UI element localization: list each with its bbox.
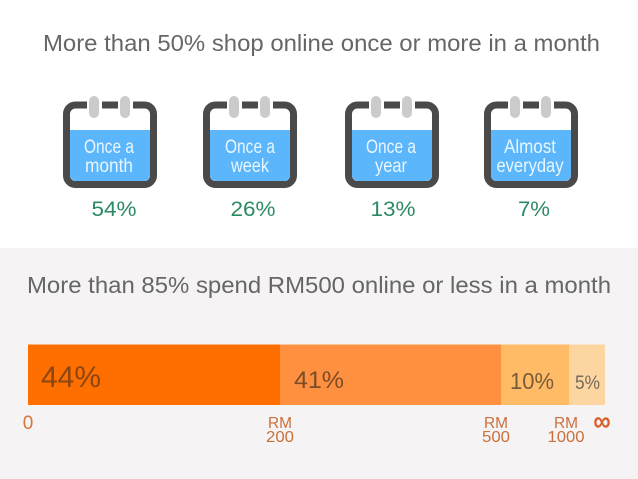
calendar icon: once a month — [66, 96, 154, 184]
value: once a week: 26% — [230, 198, 276, 221]
value: almost everyday: 7% — [518, 198, 550, 221]
calendar icon: once a year: Once a — [366, 137, 416, 158]
stacked bar chart — [28, 344, 605, 405]
calendar icon: almost everyday: Almost — [504, 137, 557, 158]
axis labels: 0 — [23, 413, 33, 434]
axis labels — [23, 406, 610, 446]
calendar icon: almost everyday — [488, 96, 574, 184]
calendar icon: once a week — [206, 96, 294, 184]
calendar icon: once a year: year — [375, 156, 408, 177]
axis labels: RM — [554, 415, 578, 432]
calendar icon: once a year — [348, 96, 436, 184]
stacked bar chart: 44% — [41, 361, 101, 394]
calendar icon: once a month: Once a — [84, 137, 134, 158]
stacked bar chart: 10% — [510, 368, 554, 394]
axis labels: RM — [484, 415, 508, 432]
axis labels: 500 — [482, 429, 510, 446]
stacked bar chart: 5% — [575, 373, 600, 394]
axis labels: 1000 — [548, 429, 585, 446]
calendar icon: almost everyday: everyday — [496, 156, 564, 177]
calendar icon: once a week: Once a — [225, 137, 275, 158]
axis labels: RM — [268, 415, 292, 432]
axis labels: ∞ — [594, 406, 610, 436]
calendar icon: once a month: month — [85, 156, 133, 177]
title: shopping frequency: More than 50% shop online once or more in a month — [43, 30, 600, 56]
value: once a year: 13% — [370, 198, 416, 221]
stacked bar chart: 41% — [294, 367, 344, 394]
value: once a month: 54% — [92, 198, 136, 221]
calendar icon: once a week: week — [230, 156, 269, 177]
title: online spending: More than 85% spend RM500 online or less in a month — [27, 272, 611, 298]
axis labels: 200 — [266, 429, 294, 446]
